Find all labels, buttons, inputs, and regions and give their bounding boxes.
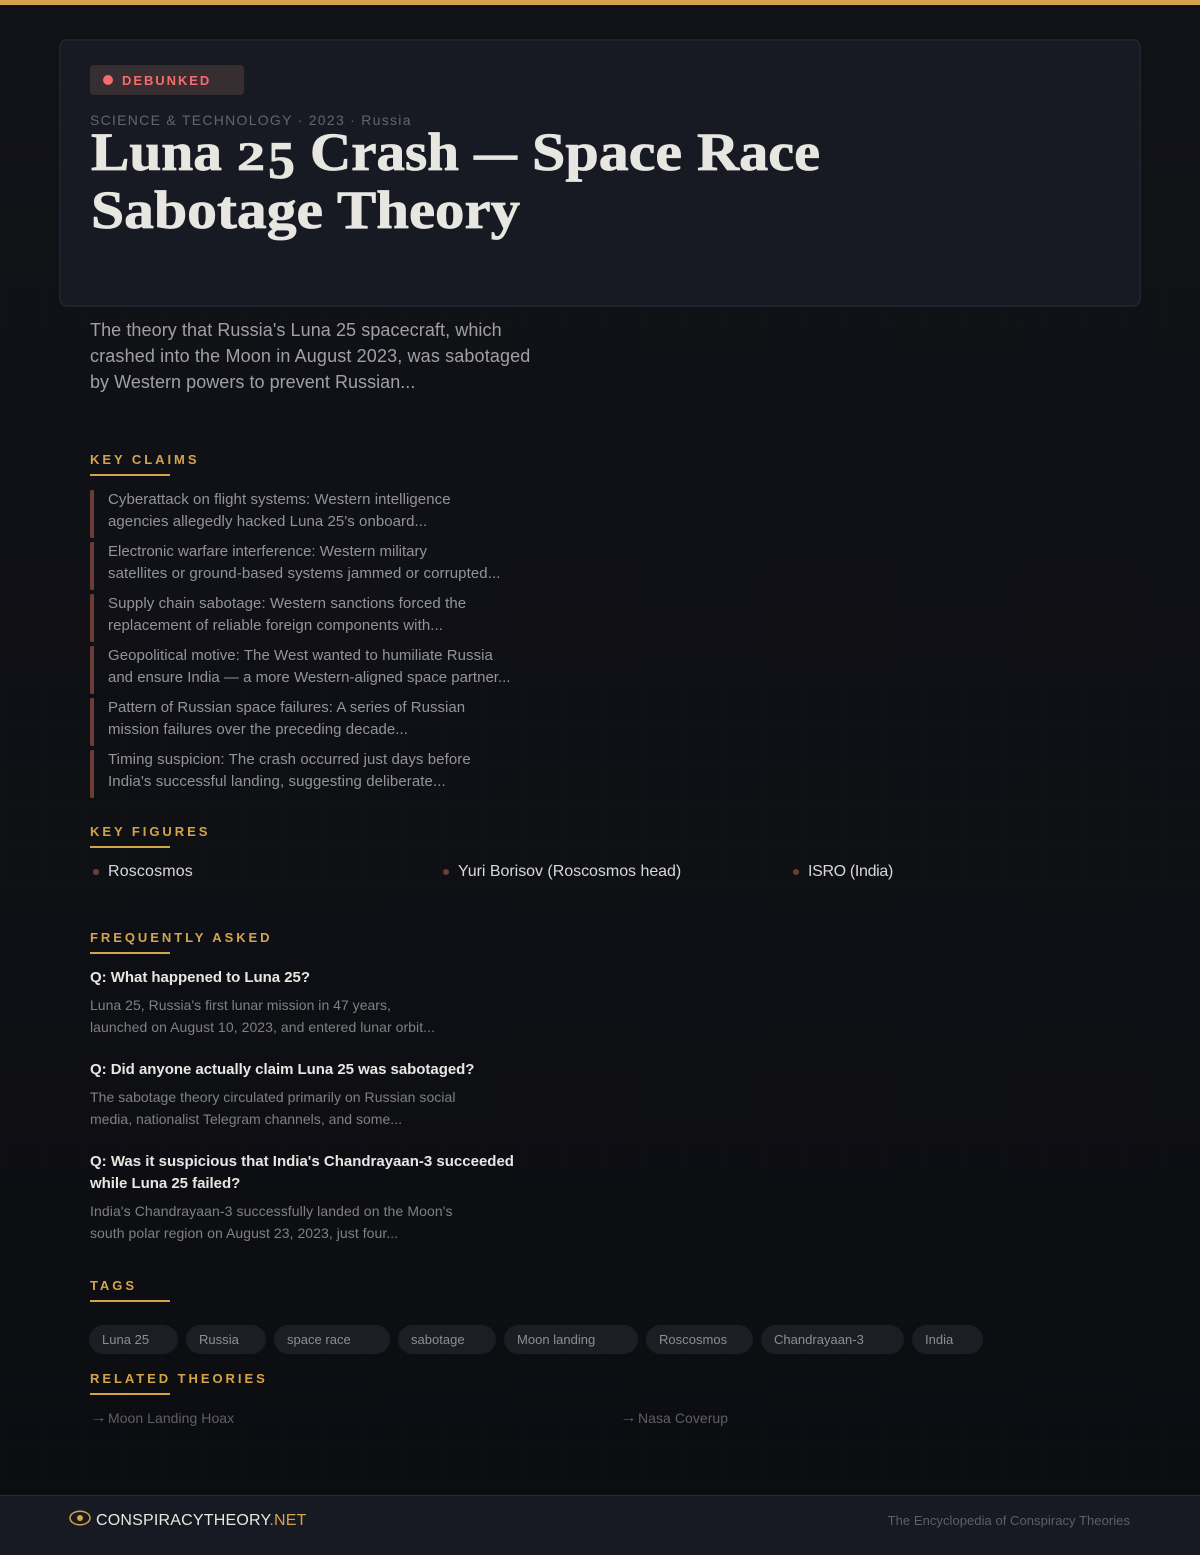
- tag: Chandrayaan-3: [761, 1325, 904, 1354]
- claim 5: [90, 698, 530, 746]
- badge: debunked: DEBUNKED: [122, 73, 211, 88]
- tag: Russia: Russia: [199, 1332, 239, 1347]
- figure: Roscosmos: Roscosmos: [108, 863, 193, 880]
- claim 1: [90, 490, 530, 538]
- claim 6: Timing suspicion: The crash occurred just days before: [108, 751, 471, 768]
- summary paragraph: [90, 320, 530, 392]
- question 3: [90, 1153, 514, 1192]
- claim 2: Electronic warfare interference: Western military: [108, 543, 427, 560]
- summary paragraph: The theory that Russia's Luna 25 spacecraft, which: [90, 320, 502, 340]
- claim 1: agencies allegedly hacked Luna 25's onboard...: [108, 513, 427, 530]
- tag: Luna 25: [89, 1325, 178, 1354]
- tag: Roscosmos: Roscosmos: [659, 1332, 727, 1347]
- title: 5: [268, 132, 295, 190]
- claim 5: mission failures over the preceding decade...: [108, 721, 408, 738]
- claim 6: India's successful landing, suggesting deliberate...: [108, 773, 446, 790]
- panel: hero header: [59, 39, 1141, 307]
- top accent bar: [0, 0, 1200, 5]
- question 2: Q: Did anyone actually claim Luna 25 was sabotaged?: [90, 1061, 474, 1078]
- title: 2: [237, 134, 265, 179]
- title: —: [473, 122, 518, 182]
- tag: Chandrayaan-3: Chandrayaan-3: [774, 1332, 864, 1347]
- related link: Moon Landing Hoax: Moon Landing Hoax: [108, 1410, 234, 1426]
- heading: key figures: KEY FIGURES: [90, 824, 210, 839]
- claim 6: [90, 750, 530, 798]
- footer brand: CONSPIRACYTHEORY.NET: [96, 1512, 307, 1529]
- title: Luna: [91, 122, 222, 182]
- claim 2: satellites or ground-based systems jammed or corrupted...: [108, 565, 501, 582]
- tag: Luna 25: Luna 25: [102, 1332, 149, 1347]
- claim 3: Supply chain sabotage: Western sanctions forced the: [108, 595, 466, 612]
- figure marker 1: [93, 869, 99, 875]
- title: Space: [532, 122, 682, 182]
- claim 4: and ensure India — a more Western-aligned space partner...: [108, 669, 510, 686]
- tag: Russia: [186, 1325, 266, 1354]
- tag: Moon landing: [504, 1325, 638, 1354]
- question 3: Q: Was it suspicious that India's Chandrayaan-3 succeeded: [90, 1153, 514, 1170]
- figure: ISRO: ISRO (India): [808, 863, 893, 880]
- heading: related theories: RELATED THEORIES: [90, 1371, 268, 1386]
- title: Crash: [310, 122, 459, 182]
- answer 2: The sabotage theory circulated primarily on Russian social: [90, 1089, 456, 1105]
- summary paragraph: crashed into the Moon in August 2023, was sabotaged: [90, 346, 530, 366]
- answer 2: [90, 1089, 456, 1127]
- answer 2: media, nationalist Telegram channels, and some...: [90, 1111, 402, 1127]
- title: [91, 122, 820, 240]
- tag: Roscosmos: [646, 1325, 753, 1354]
- claim 5: Pattern of Russian space failures: A series of Russian: [108, 699, 465, 716]
- claim 4: Geopolitical motive: The West wanted to humiliate Russia: [108, 647, 493, 664]
- claim 3: [90, 594, 530, 642]
- question 3: while Luna 25 failed?: [90, 1175, 240, 1192]
- badge: debunked: [90, 65, 244, 95]
- title: Theory: [337, 180, 520, 240]
- title: Sabotage: [91, 180, 323, 240]
- tag: India: [912, 1325, 983, 1354]
- question 1: Q: What happened to Luna 25?: [90, 969, 310, 986]
- answer 3: India's Chandrayaan-3 successfully landed on the Moon's: [90, 1203, 453, 1219]
- footer tagline: The Encyclopedia of Conspiracy Theories: [888, 1513, 1130, 1528]
- tag: space race: space race: [287, 1332, 351, 1347]
- summary paragraph: by Western powers to prevent Russian...: [90, 372, 415, 392]
- answer 3: south polar region on August 23, 2023, just four...: [90, 1225, 398, 1241]
- figure marker 2: [443, 869, 449, 875]
- answer 1: [90, 997, 435, 1035]
- answer 1: Luna 25, Russia's first lunar mission in 47 years,: [90, 997, 391, 1013]
- claim 1: Cyberattack on flight systems: Western intelligence: [108, 491, 451, 508]
- claim 3: replacement of reliable foreign components with...: [108, 617, 443, 634]
- tag: sabotage: sabotage: [411, 1332, 465, 1347]
- tag: sabotage: [398, 1325, 496, 1354]
- heading: key claims: KEY CLAIMS: [90, 452, 199, 467]
- related link: Nasa Coverup: →: [620, 1409, 637, 1425]
- tag: space race: [274, 1325, 390, 1354]
- heading: frequently asked: FREQUENTLY ASKED: [90, 930, 273, 945]
- tag: Moon landing: Moon landing: [517, 1332, 595, 1347]
- answer 1: launched on August 10, 2023, and entered lunar orbit...: [90, 1019, 435, 1035]
- figure marker 3: [793, 869, 799, 875]
- claim 2: [90, 542, 530, 590]
- footer bar: [0, 1495, 1200, 1555]
- figure: Yuri Borisov: Yuri Borisov (Roscosmos head): [458, 863, 681, 880]
- related link: Nasa Coverup: Nasa Coverup: [638, 1410, 728, 1426]
- answer 3: [90, 1203, 453, 1241]
- icon: eye logo: [69, 1510, 91, 1526]
- claim 4: [90, 646, 530, 694]
- category and date line: SCIENCE & TECHNOLOGY · 2023 · Russia: [90, 112, 412, 128]
- related link: Moon Landing Hoax: →: [90, 1409, 107, 1425]
- heading: tags: TAGS: [90, 1278, 137, 1293]
- title: Race: [697, 122, 820, 182]
- tag: India: India: [925, 1332, 953, 1347]
